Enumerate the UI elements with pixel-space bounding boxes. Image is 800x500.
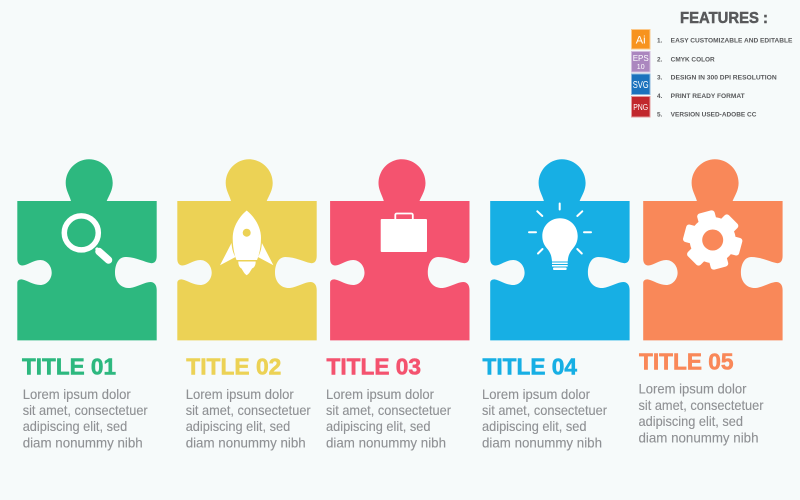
icon: briefcase: [381, 214, 427, 252]
text block 05: diam nonummy nibh: [638, 429, 758, 445]
badge: EPS 10: [632, 52, 650, 72]
badge: Ai: [632, 30, 650, 49]
puzzle piece 1: green: [17, 159, 157, 340]
feature list item 2: CMYK COLOR: [671, 56, 715, 63]
puzzle piece 3: pink: [330, 159, 470, 340]
feature list item 5: 5.: [657, 111, 663, 118]
text block 02: Lorem ipsum dolor: [186, 386, 294, 402]
text block 05: sit amet, consectetuer: [638, 397, 764, 413]
feature list item 2: 2.: [657, 56, 663, 63]
text block 03: [326, 386, 451, 450]
feature list item 4: PRINT READY FORMAT: [671, 93, 745, 100]
puzzle piece 5: orange: [643, 159, 783, 340]
text block 02: adipiscing elit, sed: [186, 418, 290, 434]
text block 01: Lorem ipsum dolor: [23, 386, 131, 402]
text block 01: sit amet, consectetuer: [23, 402, 148, 418]
features heading: FEATURES :: [680, 10, 768, 27]
feature list item 1: 1.: [657, 38, 663, 44]
text block 03: adipiscing elit, sed: [326, 418, 430, 434]
text block 02: diam nonummy nibh: [186, 434, 306, 450]
text block 05: [638, 380, 764, 445]
icon: rocket: [220, 210, 273, 275]
feature list item 5: VERSION USED-ADOBE CC: [671, 111, 757, 118]
icon: light bulb: [529, 204, 591, 270]
badge: PNG: PNG: [633, 103, 648, 112]
feature list item 4: 4.: [657, 93, 663, 100]
text block 03: sit amet, consectetuer: [326, 402, 451, 418]
badge: SVG: SVG: [633, 80, 649, 91]
text block 02: sit amet, consectetuer: [186, 402, 311, 418]
text block 04: sit amet, consectetuer: [482, 402, 607, 418]
text block 01: [23, 386, 148, 450]
title 02: TITLE 02: [186, 354, 281, 380]
text block 04: [482, 386, 607, 450]
feature list item 3: DESIGN IN 300 DPI RESOLUTION: [671, 75, 777, 82]
text block 03: Lorem ipsum dolor: [326, 386, 434, 402]
title 05: TITLE 05: [639, 349, 734, 375]
text block 01: diam nonummy nibh: [23, 434, 143, 450]
badge: PNG: [632, 96, 650, 117]
feature list item 1: EASY CUSTOMIZABLE AND EDITABLE: [671, 38, 793, 44]
badge: SVG: [632, 74, 650, 94]
puzzle piece 4: blue: [490, 159, 630, 340]
text block 01: adipiscing elit, sed: [23, 418, 127, 434]
features panel: [632, 10, 793, 118]
text block 05: adipiscing elit, sed: [638, 413, 743, 429]
icon: gear: [682, 210, 743, 270]
title 03: TITLE 03: [326, 354, 421, 380]
title 01: TITLE 01: [22, 354, 116, 380]
text block 05: Lorem ipsum dolor: [638, 380, 747, 396]
text block 02: [186, 386, 311, 450]
badge: EPS 10: 10: [637, 64, 645, 71]
text block 04: diam nonummy nibh: [482, 434, 602, 450]
icon: magnifying glass: [64, 216, 108, 260]
badge: Ai: Ai: [636, 34, 646, 46]
text block 04: adipiscing elit, sed: [482, 418, 586, 434]
puzzle piece 2: yellow: [177, 159, 317, 340]
text block 03: diam nonummy nibh: [326, 434, 446, 450]
title 04: TITLE 04: [482, 354, 577, 380]
feature list item 3: 3.: [657, 75, 663, 82]
text block 04: Lorem ipsum dolor: [482, 386, 590, 402]
badge: EPS 10: EPS: [633, 54, 649, 63]
